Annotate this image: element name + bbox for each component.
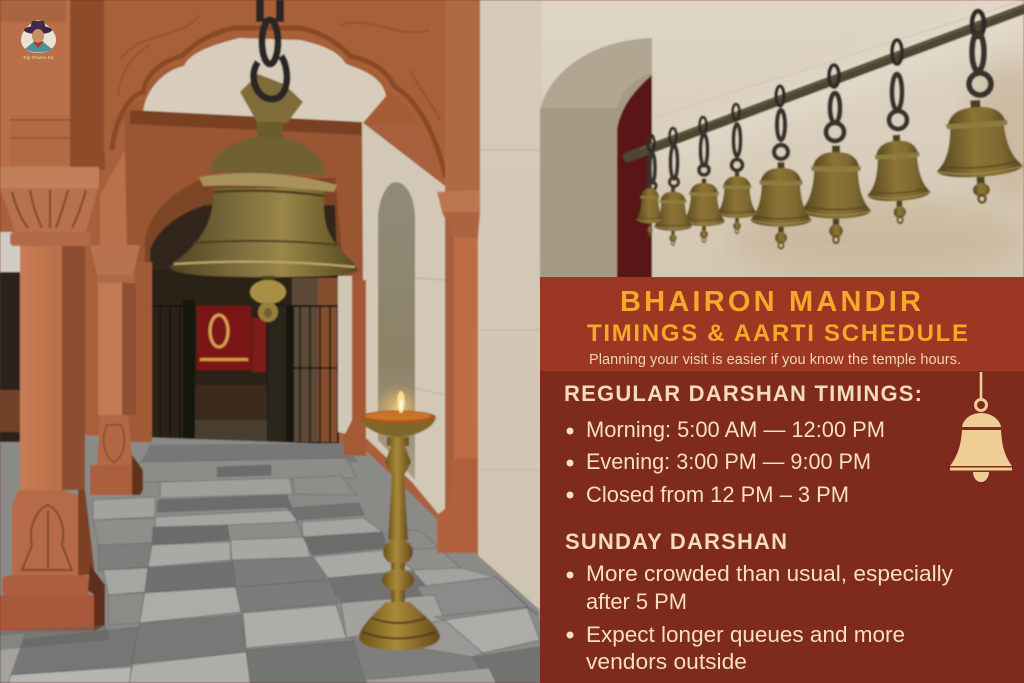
icon: bell <box>950 372 1012 482</box>
oil lamp stand <box>359 384 440 650</box>
list: sunday notes: vendors outside <box>586 649 747 674</box>
list: sunday notes: More crowded than usual, especially <box>586 561 953 586</box>
left gate <box>150 300 195 447</box>
brand logo <box>21 20 56 60</box>
small bell 6 <box>801 65 871 243</box>
floor <box>0 432 548 683</box>
sanctum shrine <box>197 306 266 372</box>
list: regular timings: Morning: 5:00 AM — 12:00 PM <box>586 417 885 442</box>
small bell 4 <box>717 104 757 234</box>
heading: regular darshan timings: REGULAR DARSHAN TIMINGS: <box>564 381 922 406</box>
left large pillar <box>0 0 110 650</box>
large hanging bell <box>170 0 358 322</box>
right cream wall <box>478 0 1024 620</box>
list: regular timings: Evening: 3:00 PM — 9:00 PM <box>586 449 871 474</box>
brand logo: Trip Ghumo Ka <box>23 55 54 60</box>
doorway arch <box>540 38 652 290</box>
small bell 1 <box>637 135 663 236</box>
chain <box>254 0 287 99</box>
small bell 2 <box>654 128 692 245</box>
list: sunday notes: Expect longer queues and more <box>586 622 905 647</box>
bell hook <box>240 74 303 124</box>
right gate <box>268 306 338 445</box>
heading: sunday darshan: SUNDAY DARSHAN <box>565 529 787 554</box>
small bell 3 <box>683 117 725 242</box>
list: regular timings: Closed from 12 PM – 3 PM <box>586 482 849 507</box>
small bell 5 <box>750 86 812 248</box>
small bell 7 <box>865 40 932 225</box>
right terracotta pillar <box>437 0 480 553</box>
right white corridor wall <box>338 122 445 522</box>
rod with row of small bells <box>628 6 1024 248</box>
middle pillar <box>90 150 152 495</box>
list: regular timings <box>566 417 885 507</box>
list: sunday notes <box>566 561 953 674</box>
inner terracotta wall <box>125 110 366 300</box>
list: sunday notes: after 5 PM <box>586 589 687 614</box>
panel: timings information <box>540 277 1024 683</box>
subtitle: TIMINGS & AARTI SCHEDULE <box>587 320 968 347</box>
title: BHAIRON MANDIR <box>620 286 921 318</box>
terracotta upper wall with scalloped arch <box>70 0 480 190</box>
small bell 8 <box>932 11 1024 206</box>
tagline: Planning your visit is easier if you know the temple hours. <box>589 352 961 368</box>
sky opening of arch <box>143 38 386 124</box>
panel header band <box>540 277 1024 371</box>
gated sanctum passage <box>150 270 338 448</box>
